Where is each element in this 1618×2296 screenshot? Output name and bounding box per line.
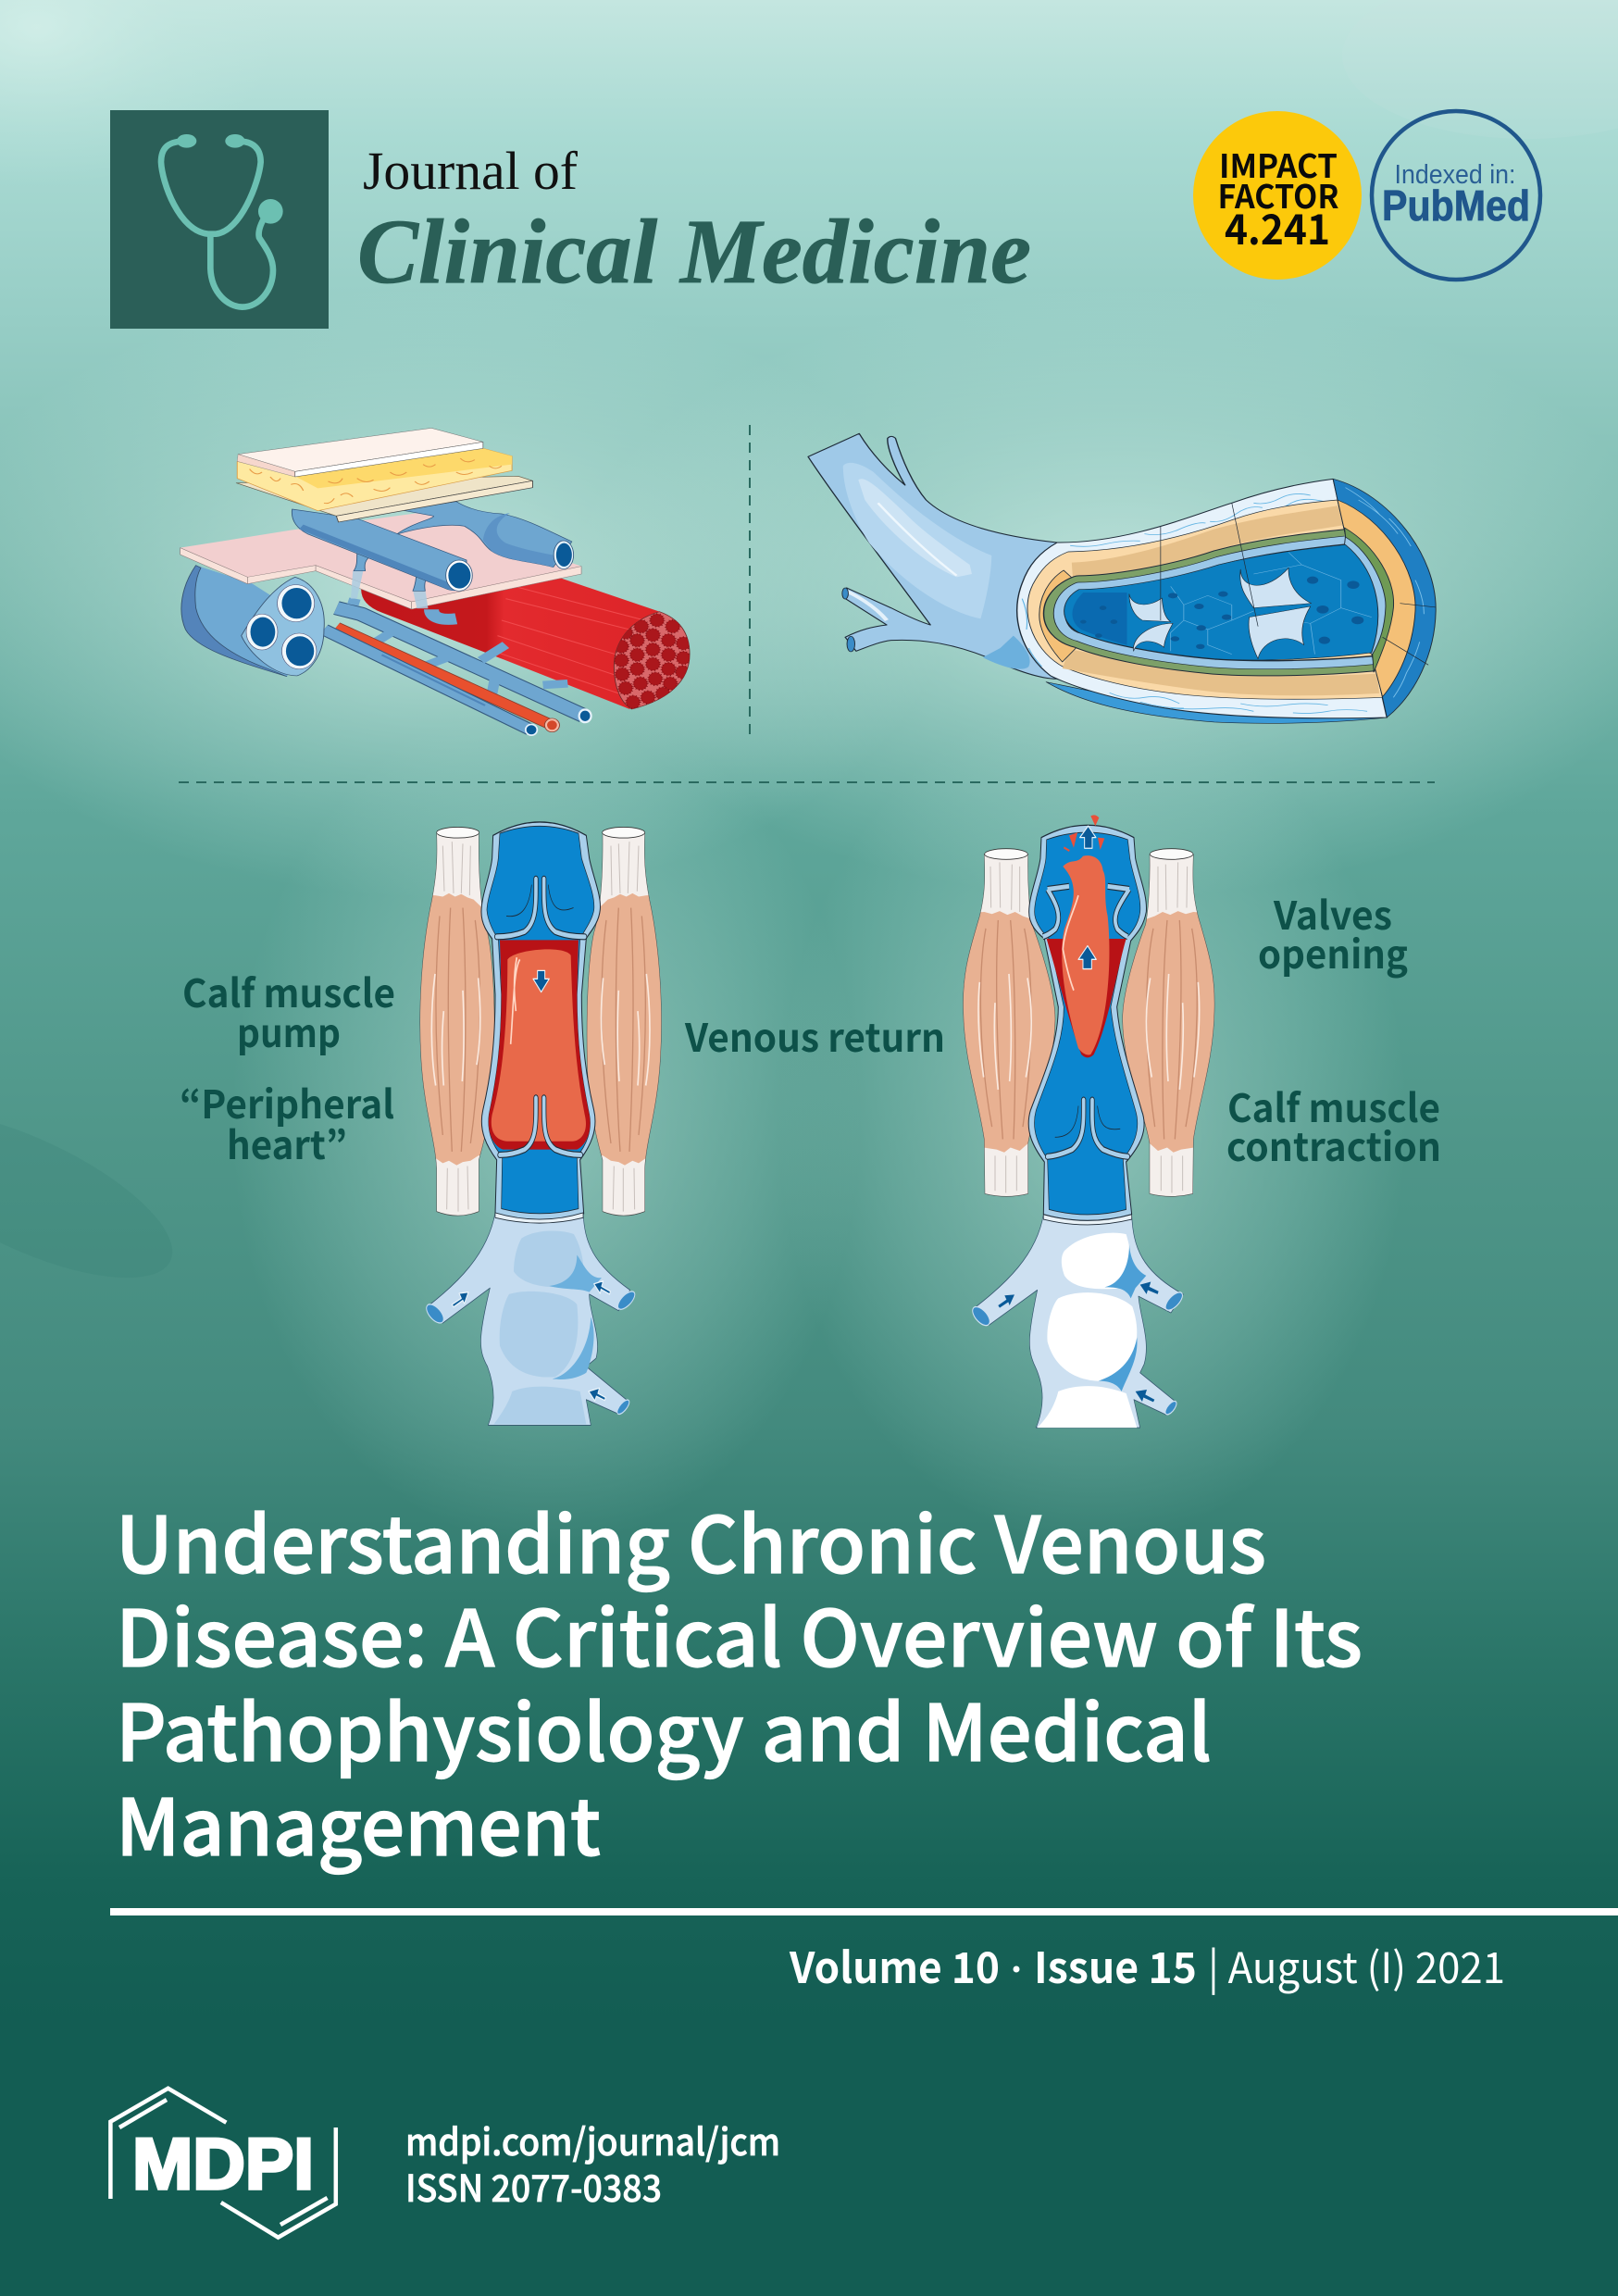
lumen with endothelial cells: [1064, 544, 1378, 660]
ejected blood column: [1047, 855, 1126, 1057]
vein lower segment: [424, 1213, 637, 1425]
fine lines: [1161, 503, 1258, 627]
lower cuff line: [495, 1213, 583, 1223]
fascial compartment tube: [181, 566, 324, 677]
skin and fat layers: [236, 428, 532, 522]
badge: indexed in PubMed: [1372, 111, 1540, 280]
lower cuff line: [1043, 1215, 1132, 1225]
vein upper wall: [481, 822, 600, 1220]
vein wall: [1028, 825, 1146, 1220]
label: valves opening: Valves: [1273, 885, 1392, 942]
label: venous return: Venous return: [684, 1007, 945, 1064]
outer vein with branches: [808, 433, 1057, 679]
issue line: Issue 15: [1034, 1935, 1197, 1996]
saphenous vein lower: [324, 630, 592, 736]
journal name: [357, 141, 1031, 303]
vein blue underside: [1046, 682, 1387, 723]
article title: [116, 1484, 1363, 1878]
label: peripheral heart: “Peripheral: [180, 1074, 394, 1130]
logo: stethoscope: [110, 110, 329, 329]
deep vein with branches: [336, 599, 584, 716]
vein blue blood: [1034, 832, 1140, 1215]
logo: MDPI: [110, 2089, 336, 2238]
label: calf muscle contraction: contraction: [1226, 1117, 1441, 1173]
badge: impact factor: IMPACT: [1219, 141, 1338, 188]
fascia plate: [180, 512, 581, 609]
issue line: [789, 1935, 1505, 1996]
label: calf muscle contraction: Calf muscle: [1227, 1078, 1440, 1134]
wall: adventitia: [1017, 479, 1387, 718]
vein lower segment: [970, 1215, 1185, 1428]
muscle bundle: [361, 578, 691, 709]
illustration: left calf, valves closed: [417, 822, 665, 1425]
journal name: Journal of: [363, 141, 579, 201]
valve leaflets open: [1043, 886, 1129, 937]
lower closed valve: [1048, 1100, 1127, 1156]
vein blue blood: [487, 826, 594, 1214]
wall: orange left end: [1039, 570, 1079, 662]
logo: MDPI: MDPI: [132, 2123, 314, 2204]
contracted muscle right: [1116, 849, 1221, 1196]
background glow: [0, 0, 1618, 1546]
article title: Disease: A Critical Overview of Its: [116, 1578, 1363, 1690]
red blood column: [489, 940, 591, 1150]
journal url and ISSN: [405, 2113, 780, 2213]
vein highlights: [842, 463, 1030, 669]
label: valves opening: opening: [1258, 924, 1408, 980]
article title: Understanding Chronic Venous: [116, 1484, 1266, 1596]
badge: impact factor: [1193, 111, 1362, 280]
calf muscle right: [581, 827, 665, 1216]
illustration: vein wall cross-section: [808, 433, 1436, 723]
great saphenous vein: [292, 509, 472, 591]
journal url and ISSN: mdpi.com/journal/jcm: [405, 2113, 780, 2166]
article title: Management: [116, 1766, 601, 1878]
venous valves: [1129, 568, 1312, 659]
title rule: [110, 1908, 1618, 1915]
perforating veins: [351, 553, 438, 608]
badge: impact factor: FACTOR: [1218, 171, 1339, 218]
wall: green and elastic bands: [1054, 537, 1374, 668]
journal name: Clinical Medicine: [357, 200, 1031, 303]
badge: indexed in PubMed: Indexed in:: [1394, 160, 1516, 190]
calf muscle left: [417, 827, 500, 1216]
label: calf muscle pump: Calf muscle: [182, 963, 395, 1019]
issue line: Volume 10: [789, 1935, 1000, 1996]
badge: impact factor: 4.241: [1225, 196, 1330, 256]
wall: media textured: [1065, 516, 1378, 686]
right end cap: [1333, 479, 1436, 718]
blood droplets and upward arrow: [1064, 815, 1104, 851]
illustration: right calf, valves opening: [956, 815, 1221, 1428]
superficial vein right: [396, 502, 574, 569]
label: calf muscle pump: pump: [237, 1003, 341, 1059]
issue line: | August (I) 2021: [1208, 1935, 1505, 1996]
illustration: leg tissue layers and veins: [180, 428, 691, 736]
journal url and ISSN: ISSN 2077-0383: [405, 2159, 662, 2213]
divider lines: [179, 425, 1435, 782]
wall: media tan: [1027, 500, 1383, 699]
contracted muscle left: [956, 849, 1062, 1196]
label: peripheral heart: heart”: [227, 1115, 347, 1171]
badge: indexed in PubMed: PubMed: [1382, 181, 1530, 230]
wall fibres: [1022, 493, 1367, 714]
valves: [497, 879, 585, 1154]
artery: [336, 627, 559, 732]
article title: Pathophysiology and Medical: [116, 1672, 1212, 1784]
